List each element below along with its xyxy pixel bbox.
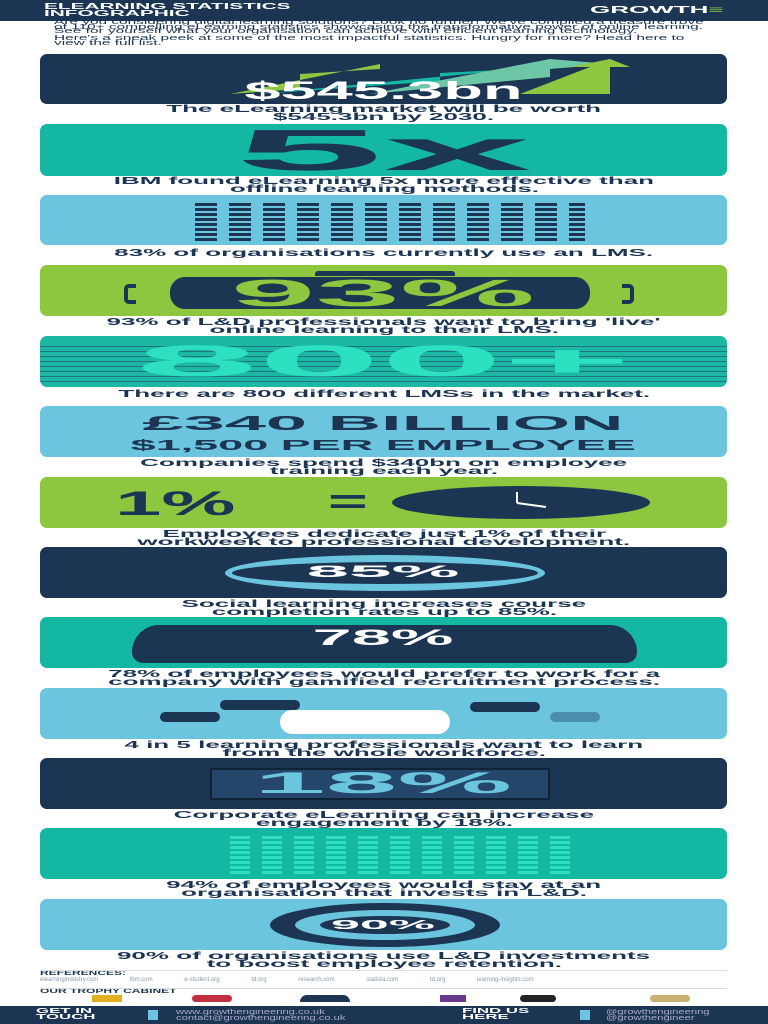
values: $1,500 PER EMPLOYEE: [131, 437, 636, 454]
value: 90%: [331, 917, 436, 932]
caption 6: Companies spend $340bn on employee: [141, 458, 627, 469]
caption 9: company with gamified recruitment process.: [108, 677, 660, 688]
footer: @growthengineer: [606, 1015, 695, 1022]
caption 9: 78% of employees would prefer to work for a: [108, 669, 660, 680]
caption 13: to boost employee retention.: [206, 959, 562, 970]
donut: [225, 555, 545, 591]
caption 13: [117, 951, 651, 970]
trophy cabinet: [40, 988, 727, 1004]
intro text: [54, 19, 704, 47]
caption 1: [166, 104, 601, 123]
icon grid: people: [195, 201, 585, 241]
chart: rising arrows: [230, 59, 630, 94]
screen: [210, 768, 550, 800]
title: ELEARNING STATISTICS: [44, 2, 291, 11]
logo: GROWTH≡: [590, 5, 724, 16]
value: 800+: [136, 337, 631, 386]
grid lines: [40, 342, 727, 382]
footer: [0, 1006, 768, 1024]
icon: gamepad: [132, 625, 637, 663]
caption 3: 83% of organisations currently use an LMS.: [115, 248, 653, 259]
icon: people & brain: [280, 710, 450, 734]
find us: HERE: [462, 1014, 509, 1021]
values: [131, 413, 636, 454]
get in touch: [36, 1008, 95, 1021]
badge: [170, 277, 590, 309]
panel 3: LMS people: [40, 195, 727, 245]
caption 6: training each year.: [270, 466, 498, 477]
caption 2: IBM found eLearning 5x more effective than: [114, 176, 654, 187]
header bar: [0, 0, 768, 21]
caption 12: 94% of employees would stay at an: [167, 880, 601, 891]
target: [270, 903, 500, 947]
intro text: Are you considering digital learning solutions? Look no further! We've compiled a treasure trove of 110+ compelling eLearning statistics showcasing the transformative power of online learning. See for yourself what your organisation can achieve with efficient learning technology.: [54, 19, 704, 35]
caption 6: [141, 458, 627, 477]
references: elearningindustry.com ibm.com e-student.org td.org research.com statista.com td.org learning-insights.com: [40, 977, 534, 983]
footer: www.growthengineering.co.uk: [176, 1009, 325, 1016]
get in touch: GET IN: [36, 1008, 92, 1015]
caption 7: [137, 529, 630, 548]
title: [44, 2, 291, 18]
caption 10: 4 in 5 learning professionals want to learn: [125, 740, 643, 751]
caption 4: 93% of L&D professionals want to bring 'live': [107, 317, 661, 328]
caption 7: Employees dedicate just 1% of their: [162, 529, 606, 540]
caption 2: offline learning methods.: [229, 184, 539, 195]
caption 10: [124, 740, 643, 759]
caption 8: Social learning increases course: [182, 599, 586, 610]
panel 7: 1% clock: [40, 477, 727, 528]
value: 1%: [115, 485, 235, 523]
icon grid: [230, 834, 570, 874]
panel 1: market: [40, 54, 727, 104]
panel 11: 18%: [40, 758, 727, 809]
trophy cabinet: OUR TROPHY CABINET: [40, 989, 176, 995]
value: 78%: [313, 625, 454, 650]
panel 2: 5x: [40, 124, 727, 176]
equals: =: [328, 483, 368, 521]
get in touch: TOUCH: [36, 1014, 95, 1021]
caption 12: [167, 880, 601, 899]
panel 13: 90% target: [40, 899, 727, 950]
panel 8: 85%: [40, 547, 727, 598]
caption 4: [107, 317, 661, 336]
caption 1: The eLearning market will be worth: [167, 104, 601, 115]
panel 5: 800+: [40, 336, 727, 387]
panel 6: spend: [40, 406, 727, 457]
panel 12: 94% people: [40, 828, 727, 879]
caption 8: completion rates up to 85%.: [211, 607, 557, 618]
caption 1: $545.3bn by 2030.: [273, 112, 495, 123]
title: INFOGRAPHIC: [44, 9, 190, 18]
panel 10: 4 in 5: [40, 688, 727, 739]
caption 13: 90% of organisations use L&D investments: [117, 951, 651, 962]
value: 18%: [254, 767, 513, 800]
caption 9: [108, 669, 660, 688]
caption 7: workweek to professional development.: [138, 537, 630, 548]
caption 8: [182, 599, 586, 618]
values: £340 BILLION: [143, 413, 624, 435]
panel 9: 78% controller: [40, 617, 727, 668]
footer: contact@growthengineering.co.uk: [176, 1015, 346, 1022]
intro text: Here's a sneak peek at some of the most impactful statistics. Hungry for more? Head here to view the full list.: [54, 35, 684, 47]
caption 11: Corporate eLearning can increase: [174, 810, 594, 821]
brackets: [124, 284, 136, 304]
references: [40, 970, 727, 988]
value: 93%: [231, 273, 536, 315]
panel 4: 93%: [40, 265, 727, 316]
caption 11: engagement by 18%.: [255, 818, 513, 829]
icon: clock: [392, 486, 650, 519]
references: REFERENCES:: [40, 971, 126, 977]
caption 5: There are 800 different LMSs in the market.: [118, 389, 650, 400]
value: 85%: [307, 562, 460, 581]
find us: FIND US: [462, 1008, 529, 1015]
caption 4: online learning to their LMS.: [209, 325, 559, 336]
caption 10: from the whole workforce.: [222, 748, 546, 759]
footer: @growthengineering: [606, 1009, 710, 1016]
find us: [462, 1008, 529, 1021]
caption 11: [174, 810, 594, 829]
caption 2: [114, 176, 654, 195]
caption 12: organisation that invests in L&D.: [181, 888, 587, 899]
